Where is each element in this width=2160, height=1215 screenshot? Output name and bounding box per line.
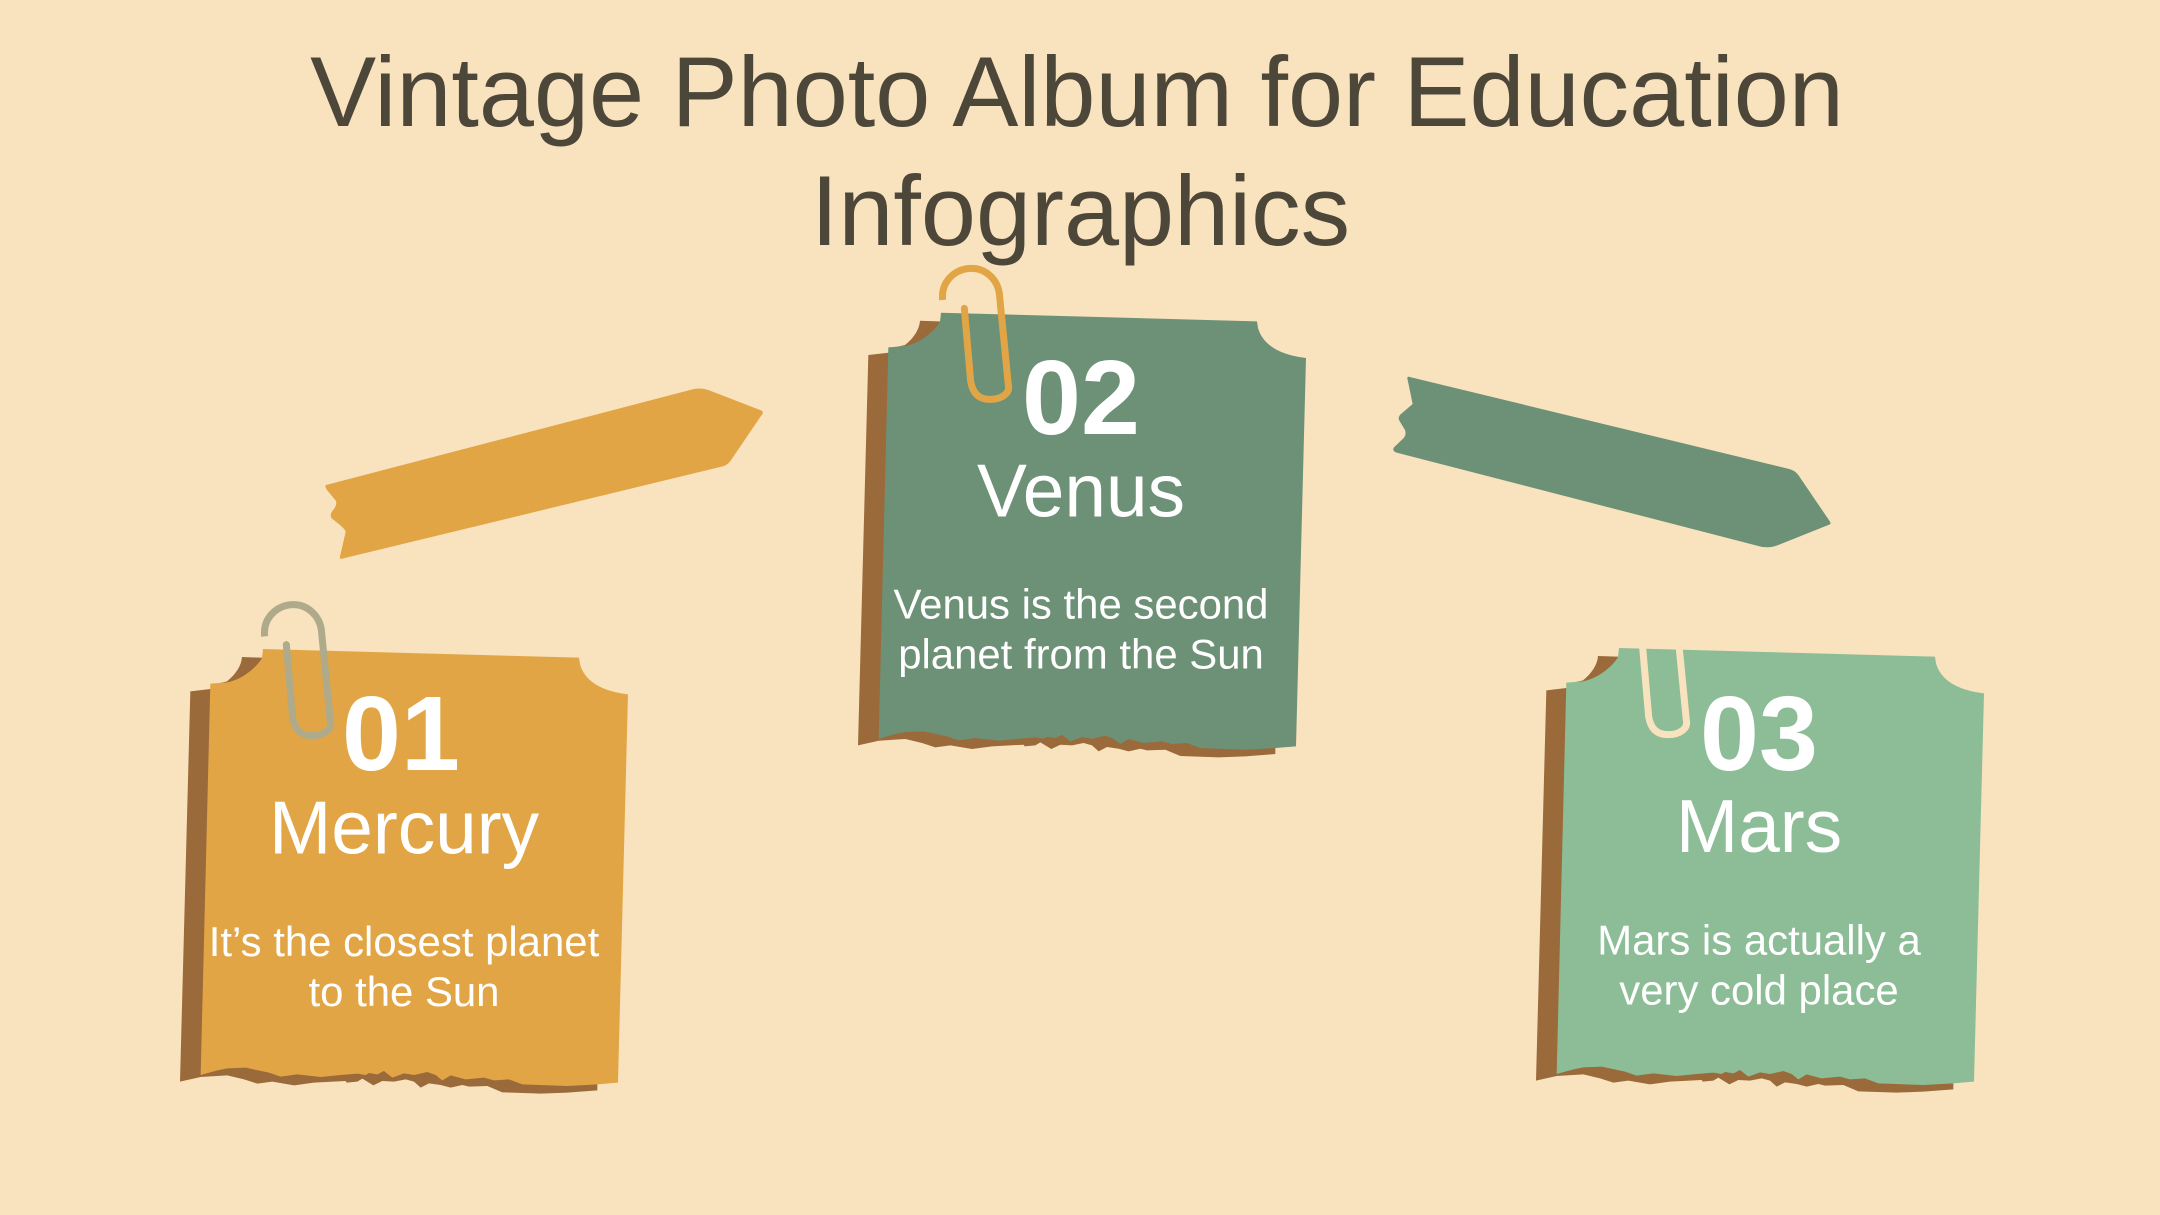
text: Mars description [1597, 916, 1921, 1014]
icon: paper clip [264, 605, 331, 736]
text: Mercury description [209, 918, 600, 1015]
text: Mercury description: to the Sun [309, 968, 499, 1015]
paper: card 01 [180, 649, 628, 1094]
paper: card 03 [1536, 648, 1984, 1093]
title [310, 36, 1844, 266]
text: Mercury description: It’s the closest planet [209, 918, 600, 965]
text: Venus description [894, 580, 1268, 678]
panel: card 03 Mars [1536, 604, 1984, 1093]
number 02: 02 [1022, 339, 1140, 457]
title: Vintage Photo Album for Education [310, 36, 1844, 147]
text: Venus description: planet from the Sun [898, 630, 1264, 678]
heading: Mercury: Mercury [269, 786, 540, 870]
text: Mars description: very cold place [1619, 966, 1899, 1014]
paper: card 02 [858, 313, 1306, 757]
heading: Mars: Mars [1676, 784, 1842, 868]
number 01: 01 [342, 675, 460, 793]
arrow: green tape pointing to card 03 [1393, 377, 1831, 547]
text: Venus description: Venus is the second [894, 580, 1268, 628]
arrow: orange tape pointing to card 02 [325, 388, 763, 559]
icon: paper clip [1620, 604, 1687, 735]
panel: card 01 Mercury [180, 605, 628, 1094]
number 03: 03 [1700, 675, 1818, 793]
title: Infographics [811, 155, 1350, 266]
text: Mars description: Mars is actually a [1597, 916, 1921, 964]
icon: paper clip [942, 268, 1009, 399]
heading: Venus: Venus [977, 448, 1185, 532]
panel: card 02 Venus [858, 268, 1306, 757]
